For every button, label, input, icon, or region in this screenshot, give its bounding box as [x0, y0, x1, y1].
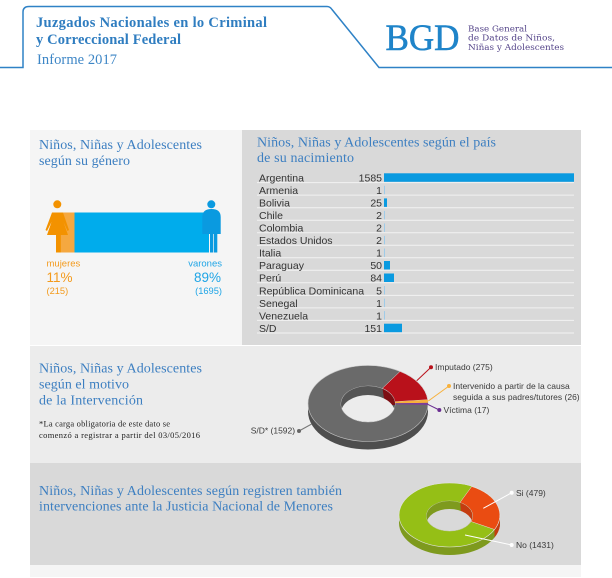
stat: mujeres: 11% [46, 270, 73, 285]
stat: varones [188, 259, 222, 296]
bar chart: country: 25 [370, 198, 382, 210]
bar chart: country: 1 [376, 185, 382, 197]
gender proportion bar [58, 212, 209, 252]
heading: juvenile court: intervenciones ante la Justicia Nacional de Menores [39, 500, 333, 515]
bar chart: country: Bolivia [259, 198, 290, 210]
icon: woman [46, 200, 69, 252]
bar chart: country: 2 [376, 223, 382, 235]
stat: mujeres: mujeres [46, 259, 81, 270]
heading: juvenile court: Niños, Niñas y Adolescentes según registren también [39, 484, 342, 499]
report title: y Correccional Federal [36, 32, 181, 48]
report title [36, 15, 267, 68]
bar chart: country: 1 [376, 248, 382, 260]
BGD logo [386, 18, 564, 59]
BGD logo: de Datos de Niños, [468, 34, 555, 42]
bar chart: country: Armenia [259, 185, 298, 197]
callout: Imputado: Imputado (275) [435, 362, 493, 372]
callout: Intervenido: Intervenido a partir de la causa [453, 381, 570, 391]
bar chart: country: 50 [370, 260, 382, 272]
bar chart: country: Argentina [259, 172, 304, 184]
heading: gender [39, 138, 202, 169]
stat: varones: (1695) [195, 286, 222, 296]
stat: mujeres [46, 259, 81, 296]
bar chart: country: 1 [376, 298, 382, 310]
heading: gender: Niños, Niñas y Adolescentes [39, 138, 202, 153]
bar chart: country: República Dominicana [259, 285, 364, 297]
callout: S/D [251, 424, 312, 436]
heading: country: Niños, Niñas y Adolescentes según el país [257, 136, 496, 150]
stat: mujeres: (215) [46, 286, 68, 296]
bottom strip [30, 565, 581, 577]
callout: No: No (1431) [516, 540, 554, 550]
bar chart: country: 5 [376, 285, 382, 297]
BGD logo: Base General [468, 24, 527, 34]
panel: gender [30, 130, 242, 345]
bar chart: country: 84 [370, 273, 382, 285]
panel: juvenile court [30, 463, 581, 565]
donut chart: juvenile court [399, 483, 500, 555]
bar chart: country: 151 [364, 323, 382, 335]
callout: Si [483, 488, 546, 508]
header frame [0, 6, 612, 68]
bar chart: country: 1 [376, 310, 382, 322]
panel: intervention reason [30, 346, 581, 463]
bar chart: country: Perú [259, 273, 281, 285]
callout: Si: Si (479) [516, 488, 546, 498]
callout: Intervenido: seguida a sus padres/tutores (26) [453, 392, 580, 402]
BGD logo: Niñas y Adolescentes [468, 43, 564, 52]
bar chart: country: Italia [259, 248, 281, 260]
callout: S/D: S/D* (1592) [251, 426, 295, 436]
bar chart: country: 2 [376, 235, 382, 247]
heading: reason [39, 362, 202, 409]
bar chart: country: 1585 [359, 172, 382, 184]
bar chart: country: Venezuela [259, 310, 308, 322]
bar chart: country: Chile [259, 210, 283, 222]
heading: country [257, 136, 496, 166]
bar chart: country: 2 [376, 210, 382, 222]
callout: Víctima: Víctima (17) [444, 405, 489, 415]
heading: reason: según el motivo [39, 378, 129, 393]
heading: gender: según su género [39, 154, 130, 169]
BGD logo: BGD [386, 18, 460, 59]
stat: varones: varones [188, 259, 222, 270]
footnote: comenzó a registrar a partir del 03/05/2016 [39, 430, 200, 440]
bar chart: country: Paraguay [259, 260, 305, 272]
report title: Juzgados Nacionales en lo Criminal [36, 15, 267, 31]
heading: reason: Niños, Niñas y Adolescentes [39, 362, 202, 377]
stat: varones: 89% [194, 270, 221, 285]
bar chart: country: Estados Unidos [259, 235, 333, 247]
bar chart: country [257, 172, 574, 335]
footnote [39, 419, 200, 440]
panel: country of birth [242, 130, 581, 345]
donut chart: reason [308, 366, 428, 450]
callout: Víctima [428, 404, 489, 415]
bar chart: country: Colombia [259, 223, 304, 235]
heading: country: de su nacimiento [257, 151, 354, 166]
bar chart: country: Senegal [259, 298, 298, 310]
heading: reason: de la Intervención [39, 394, 143, 409]
callout: Intervenido [428, 381, 580, 402]
callout: No [465, 535, 554, 550]
icon: man [202, 200, 221, 252]
heading: juvenile court [39, 484, 342, 515]
callout: Imputado [417, 362, 493, 381]
bar chart: country: S/D [259, 323, 277, 335]
footnote: *La carga obligatoria de este dato se [39, 419, 170, 429]
report title: Informe 2017 [37, 52, 117, 68]
